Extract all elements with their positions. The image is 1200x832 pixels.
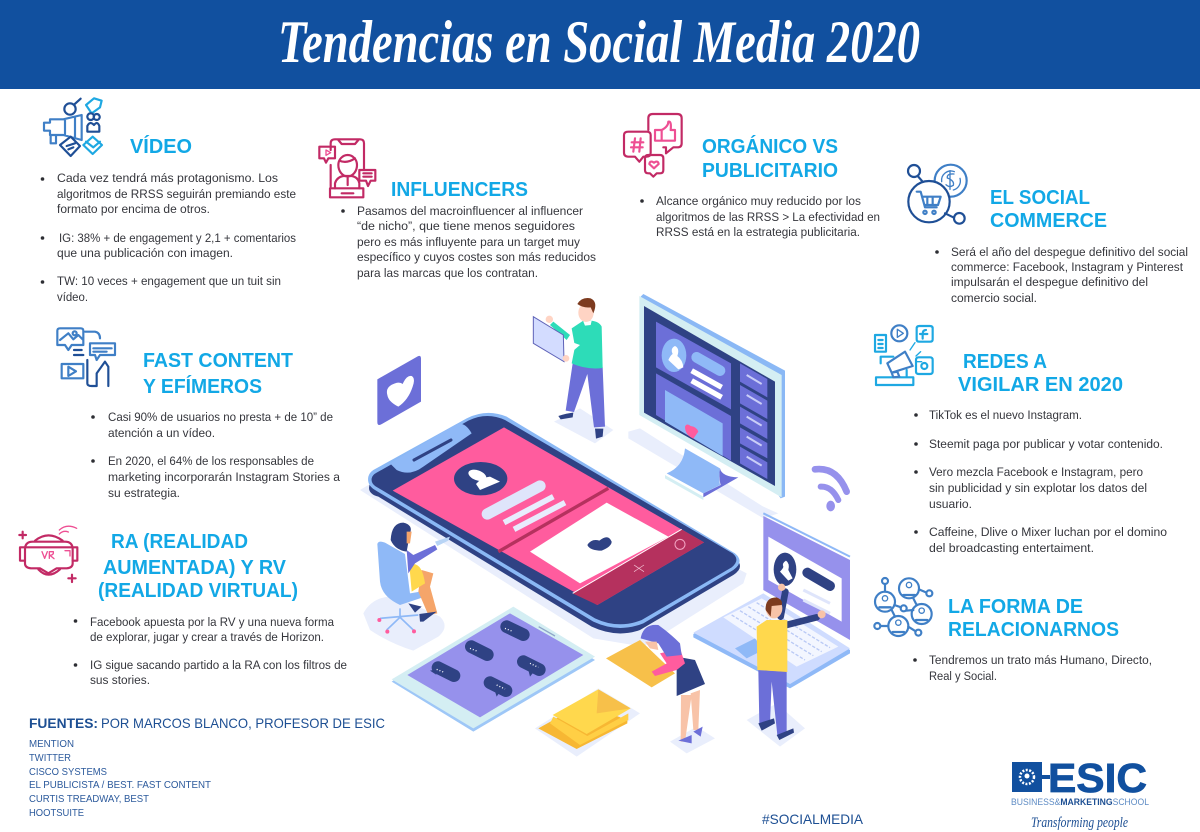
icon: influencer on phone: [319, 139, 375, 197]
ESIC logo: BUSINESS&MARKETINGSCHOOL: [1011, 797, 1149, 808]
heart tile: [377, 356, 421, 425]
heading: AUMENTADA) Y RV: [103, 556, 286, 579]
ESIC logo: ESIC: [1048, 755, 1147, 801]
bullet list: vídeo.: [57, 290, 88, 304]
bullet list: “de nicho”, que tiene menos seguidores: [357, 219, 575, 233]
woman on office chair: [363, 523, 450, 651]
heading: EL SOCIAL: [990, 186, 1090, 209]
ESIC logo: Transforming people: [1031, 815, 1128, 831]
icon: megaphone and social symbols: [44, 98, 102, 156]
bullet list: de explorar, jugar y crear a través de Horizon.: [90, 630, 324, 644]
heading: REDES A: [963, 350, 1047, 373]
tablet with chat bubbles: [392, 607, 595, 732]
desktop monitor: [628, 294, 785, 518]
bullet list: [640, 194, 880, 239]
bullet list: pero es más influyente para un target muy: [357, 235, 581, 249]
bullet list: impulsarán el despegue definitivo del: [951, 275, 1148, 289]
heading: COMMERCE: [990, 209, 1107, 232]
bullet list: Real y Social.: [929, 669, 997, 683]
fuentes heading: POR MARCOS BLANCO, PROFESOR DE ESIC: [101, 715, 385, 731]
section: RA y RV: [19, 526, 347, 687]
heading: [143, 349, 293, 398]
bullet list: Facebook apuesta por la RV y una nueva forma: [90, 615, 334, 629]
bullet list: Vero mezcla Facebook e Instagram, pero: [929, 465, 1143, 479]
icon: laptop megaphone and networks: [875, 325, 933, 385]
bullet list: marketing incorporarán Instagram Stories a: [108, 470, 340, 484]
bullet list: que una publicación con imagen.: [57, 246, 233, 260]
bullet list: Será el año del despegue definitivo del social: [951, 245, 1188, 259]
source list: MENTION: [29, 738, 74, 750]
heading: RA (REALIDAD: [111, 530, 248, 553]
icon: media content on phone: [57, 328, 115, 386]
section: el social commerce: [908, 165, 1188, 305]
source list: CISCO SYSTEMS: [29, 766, 107, 778]
bullet list: TikTok es el nuevo Instagram.: [929, 408, 1082, 422]
icon: VR headset: [19, 526, 77, 582]
man with green shirt and tablet: [533, 298, 613, 443]
ESIC logo: [1011, 755, 1149, 831]
bullet list: atención a un vídeo.: [108, 426, 215, 440]
heading: [990, 186, 1107, 232]
bullet list: algoritmos de las RRSS > La efectividad en: [656, 210, 880, 224]
heading: FAST CONTENT: [143, 349, 293, 372]
bullet list: para las marcas que los contratan.: [357, 266, 538, 280]
section: redes a vigilar: [875, 325, 1167, 555]
heading: [958, 350, 1123, 396]
bullet list: formato por encima de otros.: [57, 202, 210, 216]
bullet list: específico y cuyos costes son más reducidos: [357, 250, 596, 264]
section: fast content: [57, 328, 340, 500]
bullet list: Alcance orgánico muy reducido por los: [656, 194, 861, 208]
heading: [702, 135, 838, 182]
bullet list: [41, 171, 296, 304]
heading: PUBLICITARIO: [702, 159, 838, 182]
bullet list: sus stories.: [90, 673, 150, 687]
laptop and man in yellow vest: [693, 513, 850, 747]
section: la forma de relacionarnos: [874, 578, 1152, 683]
central isometric illustration: [360, 294, 850, 757]
title: Tendencias en Social Media 2020: [278, 9, 920, 75]
bullet list: TW: 10 veces + engagement que un tuit sin: [57, 274, 281, 288]
bullet list: [914, 408, 1167, 555]
bullet list: Casi 90% de usuarios no presta + de 10” de: [108, 410, 333, 424]
source list: [29, 738, 212, 819]
bullet list: [341, 204, 596, 280]
bullet list: En 2020, el 64% de los responsables de: [108, 454, 314, 468]
bullet list: Steemit paga por publicar y votar contenido.: [929, 437, 1163, 451]
woman holding envelope: [606, 625, 715, 753]
bullet list: Cada vez tendrá más protagonismo. Los: [57, 171, 278, 185]
stack of envelopes: [535, 688, 640, 757]
bullet list: comercio social.: [951, 291, 1037, 305]
source list: EL PUBLICISTA / BEST. FAST CONTENT: [29, 779, 212, 791]
source list: HOOTSUITE: [29, 807, 84, 819]
bullet list: su estrategia.: [108, 486, 180, 500]
section: influencers: [319, 139, 596, 280]
wifi symbol: [815, 469, 847, 511]
bullet list: IG: 38% + de engagement y 2,1 + comentarios: [59, 231, 296, 245]
icon: like, hashtag and heart bubbles: [624, 114, 682, 177]
bullet list: del broadcasting entertaiment.: [929, 541, 1094, 555]
heading: ORGÁNICO VS: [702, 135, 838, 158]
bullet list: RRSS está en la estrategia publicitaria.: [656, 225, 860, 239]
heading: (REALIDAD VIRTUAL): [98, 579, 298, 602]
bullet list: Caffeine, Dlive o Mixer luchan por el domino: [929, 525, 1167, 539]
bullet list: [913, 653, 1152, 683]
heading: INFLUENCERS: [391, 178, 528, 201]
fuentes heading: FUENTES:: [29, 715, 98, 731]
heading: VIGILAR EN 2020: [958, 373, 1123, 396]
source list: CURTIS TREADWAY, BEST: [29, 793, 150, 805]
icon: shopping cart and coin: [908, 165, 967, 224]
heading: [98, 530, 298, 602]
heading: VÍDEO: [130, 135, 192, 158]
bullet list: usuario.: [929, 497, 972, 511]
heading: RELACIONARNOS: [948, 618, 1119, 641]
bullet list: [91, 410, 340, 500]
heading: LA FORMA DE: [948, 595, 1083, 618]
header band with title: [0, 0, 1200, 89]
bullet list: algoritmos de RRSS seguirán premiando este: [57, 187, 296, 201]
smartphone: [360, 413, 747, 647]
bullet list: commerce: Facebook, Instagram y Pinterest: [951, 260, 1184, 274]
source list: TWITTER: [29, 752, 71, 764]
icon: connected people network: [874, 578, 932, 636]
heading: [948, 595, 1119, 641]
bullet list: Pasamos del macroinfluencer al influencer: [357, 204, 583, 218]
bullet list: [74, 615, 347, 687]
bullet list: Tendremos un trato más Humano, Directo,: [929, 653, 1152, 667]
section: orgánico vs publicitario: [624, 114, 880, 239]
bullet list: [935, 245, 1188, 305]
bullet list: sin publicidad y sin explotar los datos del: [929, 481, 1147, 495]
heading: Y EFÍMEROS: [143, 375, 262, 398]
section: vídeo: [41, 98, 296, 304]
section: fuentes: [29, 715, 385, 819]
hashtag: #SOCIALMEDIA: [762, 811, 864, 827]
bullet list: IG sigue sacando partido a la RA con los filtros de: [90, 658, 347, 672]
